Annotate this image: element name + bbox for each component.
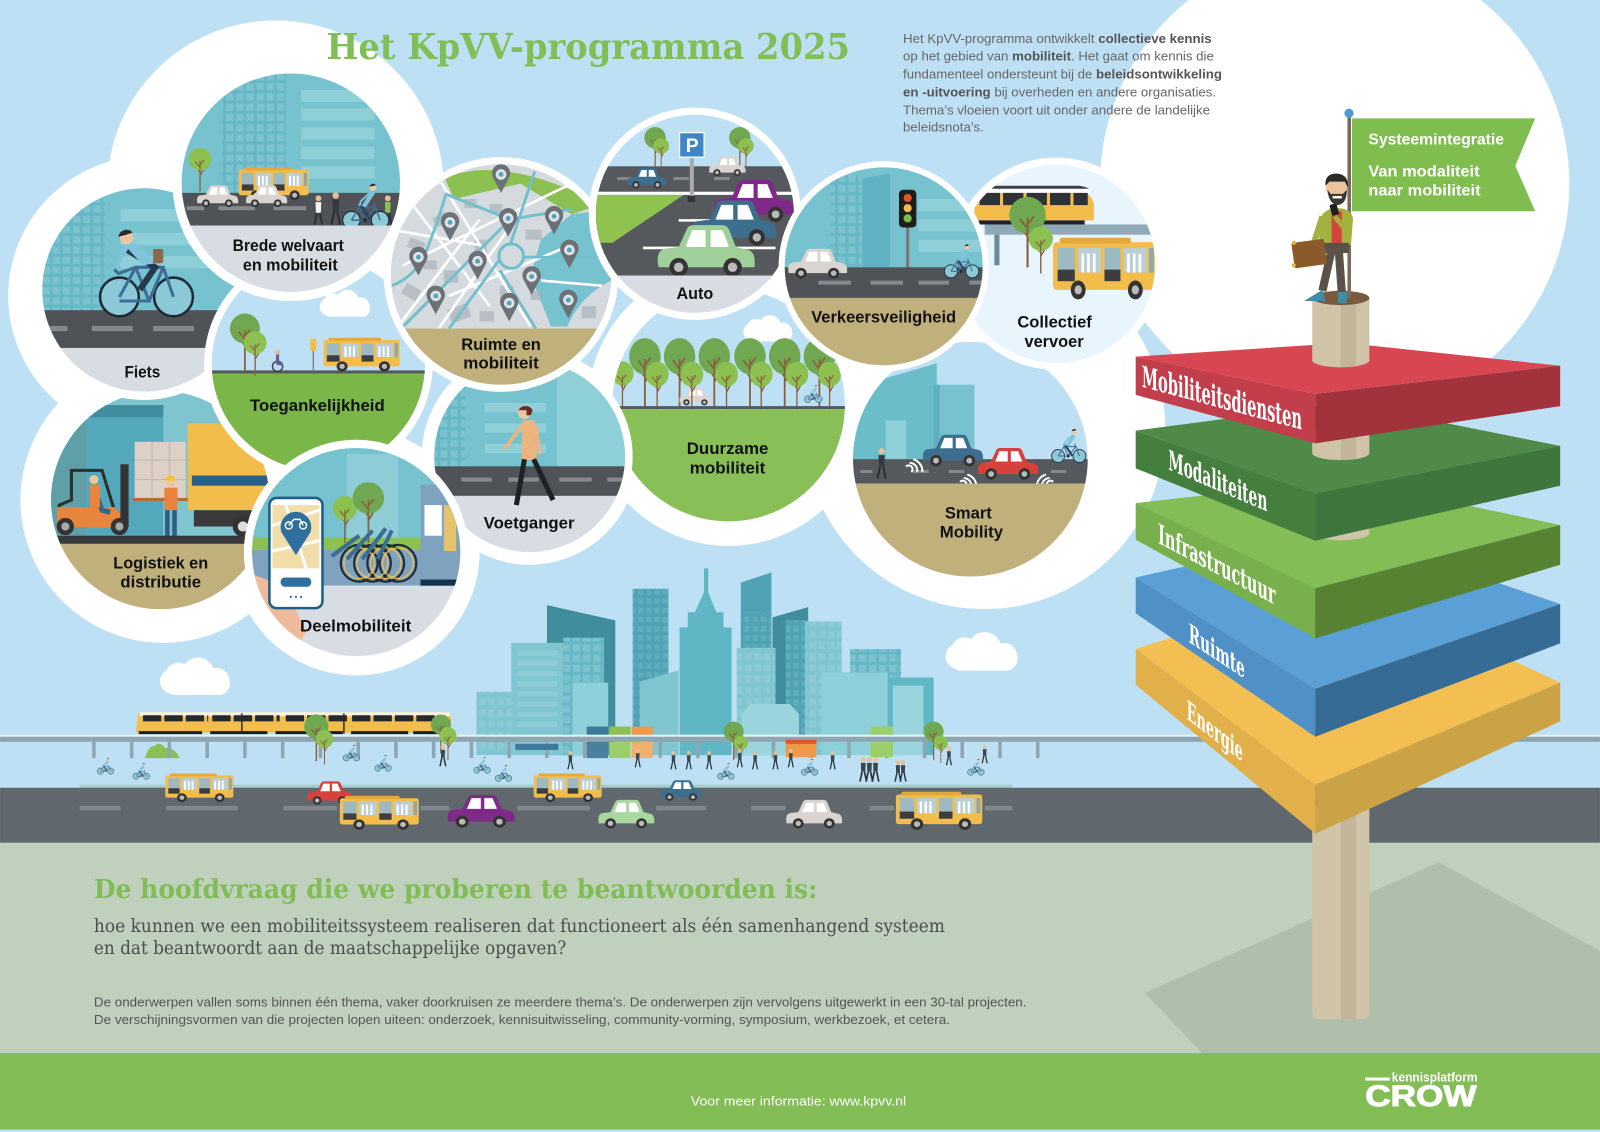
label: en mobiliteit — [243, 256, 338, 274]
panel: Brede welvaart en mobiliteit — [172, 64, 409, 301]
footer text: Voor meer informatie: www.kpvv.nl — [691, 1094, 906, 1109]
heading: main question: De hoofdvraag die we proberen te beantwoorden is: — [94, 874, 817, 905]
label: Verkeersveiligheid — [811, 308, 956, 326]
intro text block: op het gebied van mobiliteit. Het gaat om kennis die — [903, 49, 1214, 64]
label: Fiets — [125, 364, 160, 382]
illustration: row of trees — [612, 294, 845, 522]
illustration: pedestrian on road — [434, 370, 625, 552]
panel: Ruimte en mobiliteit — [383, 157, 622, 392]
man with suitcase and phone — [1291, 173, 1353, 303]
main question text — [94, 916, 945, 959]
panel: Toegankelijkheid — [204, 270, 432, 465]
label: Mobility — [940, 524, 1003, 542]
shops under the viaduct — [515, 727, 893, 758]
layer: Mobiliteitsdiensten: Mobiliteitsdiensten — [1142, 360, 1302, 438]
layer: Mobiliteitsdiensten — [1136, 343, 1560, 443]
pedestrians on the promenade — [440, 745, 987, 782]
cloud — [160, 658, 230, 695]
main question text: en dat beantwoordt aan de maatschappelijke opgaven? — [94, 938, 566, 959]
label: distributie — [120, 574, 201, 592]
illustration: bike sharing app and station — [252, 448, 460, 656]
road with vehicles — [0, 773, 1600, 843]
illustration: wheelchair user at bus stop — [212, 270, 425, 465]
pole segment below Mobiliteitsdiensten — [1312, 429, 1369, 460]
pole bottom — [1312, 806, 1369, 1019]
white cloud backdrop — [8, 0, 1569, 675]
panel: Fiets — [42, 188, 234, 400]
illustration: traffic light, car and cyclist — [784, 167, 983, 366]
lower green panel — [0, 843, 1600, 1053]
layer: Ruimte: Ruimte — [1189, 617, 1245, 685]
intro text block: beleidsnota’s. — [903, 120, 984, 135]
CROW logo: kennisplatform — [1392, 1070, 1478, 1085]
flag with ball and pole: Van modaliteit — [1368, 164, 1480, 181]
footer bar — [0, 1053, 1600, 1130]
layer: Ruimte — [1136, 531, 1560, 737]
panel: Collectief vervoer — [968, 158, 1156, 370]
icon: parking sign — [680, 133, 704, 157]
intro text block: Thema’s vloeien voort uit onder andere de landelijke — [903, 102, 1210, 117]
illustration: street with bus, cars and pedestrians — [182, 74, 400, 292]
intro text block — [903, 31, 1222, 135]
label: vervoer — [1024, 333, 1084, 351]
illustration: forklift and truck — [51, 393, 268, 610]
layer: Modaliteiten — [1136, 403, 1560, 541]
panel: Smart Mobility — [853, 342, 1088, 576]
cloud — [946, 632, 1018, 671]
label: mobiliteit — [463, 354, 539, 372]
label: Deelmobiliteit — [300, 618, 412, 636]
label: Toegankelijkheid — [250, 397, 385, 415]
label: Auto — [677, 285, 713, 303]
illustration: parking road with cars — [596, 114, 794, 313]
intro text block: fundamenteel ondersteunt bij de beleidsontwikkeling — [903, 67, 1222, 82]
layer: Energie — [1136, 582, 1560, 834]
illustration: city map with location pins — [390, 164, 612, 385]
label: Brede welvaart — [233, 237, 344, 255]
illustration: tram on viaduct and bus — [973, 164, 1156, 363]
flag with ball and pole: Systeemintegratie — [1368, 131, 1504, 148]
layer: Modaliteiten: Modaliteiten — [1168, 444, 1267, 518]
viaduct — [0, 735, 1600, 758]
flag with ball and pole — [1344, 109, 1535, 298]
layer: Infrastructuur — [1136, 480, 1560, 638]
cyclists on the promenade — [97, 745, 984, 781]
intro text block: Het KpVV-programma ontwikkelt collectieve kennis — [903, 31, 1212, 46]
intro text block: en -uitvoering bij overheden en andere organisaties. — [903, 84, 1216, 99]
label — [687, 440, 768, 477]
bush — [145, 744, 180, 758]
CROW logo — [1365, 1070, 1478, 1113]
label: Logistiek en — [113, 554, 208, 572]
street trees — [304, 714, 948, 764]
label — [940, 504, 1003, 542]
panel: Logistiek en distributie — [51, 393, 268, 610]
pole segment below Modaliteiten — [1323, 510, 1369, 540]
explanatory text: De onderwerpen vallen soms binnen één thema, vaker doorkruisen ze meerdere thema’s. De onderwerpen zijn vervolgens uitgewerkt in een 30-tal projecten. — [94, 995, 1027, 1010]
label: Duurzame — [687, 440, 768, 458]
label: Smart — [945, 504, 992, 522]
pole top — [1312, 291, 1369, 367]
layer: Energie: Energie — [1187, 695, 1243, 769]
illustration: cyclist on road — [42, 188, 234, 392]
explanatory text: De verschijningsvormen van die projecten lopen uiteen: onderzoek, kennisuitwisseling, community-vorming, symposium, werkbezoek, et cetera. — [94, 1012, 950, 1027]
icon: parking sign: P — [686, 135, 699, 157]
mountain shape — [1145, 862, 1600, 1053]
flag with ball and pole: naar mobiliteit — [1368, 182, 1481, 199]
label: mobiliteit — [690, 459, 766, 477]
title: Het KpVV-programma 2025 — [327, 26, 850, 68]
panel: Voetganger — [434, 370, 633, 552]
label: Voetganger — [484, 515, 575, 533]
label: Ruimte en — [461, 336, 541, 354]
label: Collectief — [1017, 314, 1092, 332]
panel: Deelmobiliteit — [244, 440, 469, 664]
label — [461, 336, 541, 372]
panel: Duurzame mobiliteit — [612, 294, 845, 522]
explanatory text — [94, 995, 1027, 1027]
layer: Infrastructuur: Infrastructuur — [1158, 517, 1276, 612]
CROW logo: CROW — [1365, 1080, 1477, 1113]
label — [1017, 314, 1092, 351]
illustration: connected vehicles — [847, 337, 1097, 581]
icon: traffic light — [899, 190, 916, 228]
label — [113, 554, 208, 592]
cityscape skyline — [477, 568, 934, 755]
main question text: hoe kunnen we een mobiliteitssysteem realiseren dat functioneert als één samenhangend systeem — [94, 916, 945, 937]
tram on viaduct — [136, 712, 451, 734]
label — [233, 237, 344, 274]
panel: Auto — [589, 107, 801, 320]
panel: Verkeersveiligheid — [776, 161, 995, 371]
